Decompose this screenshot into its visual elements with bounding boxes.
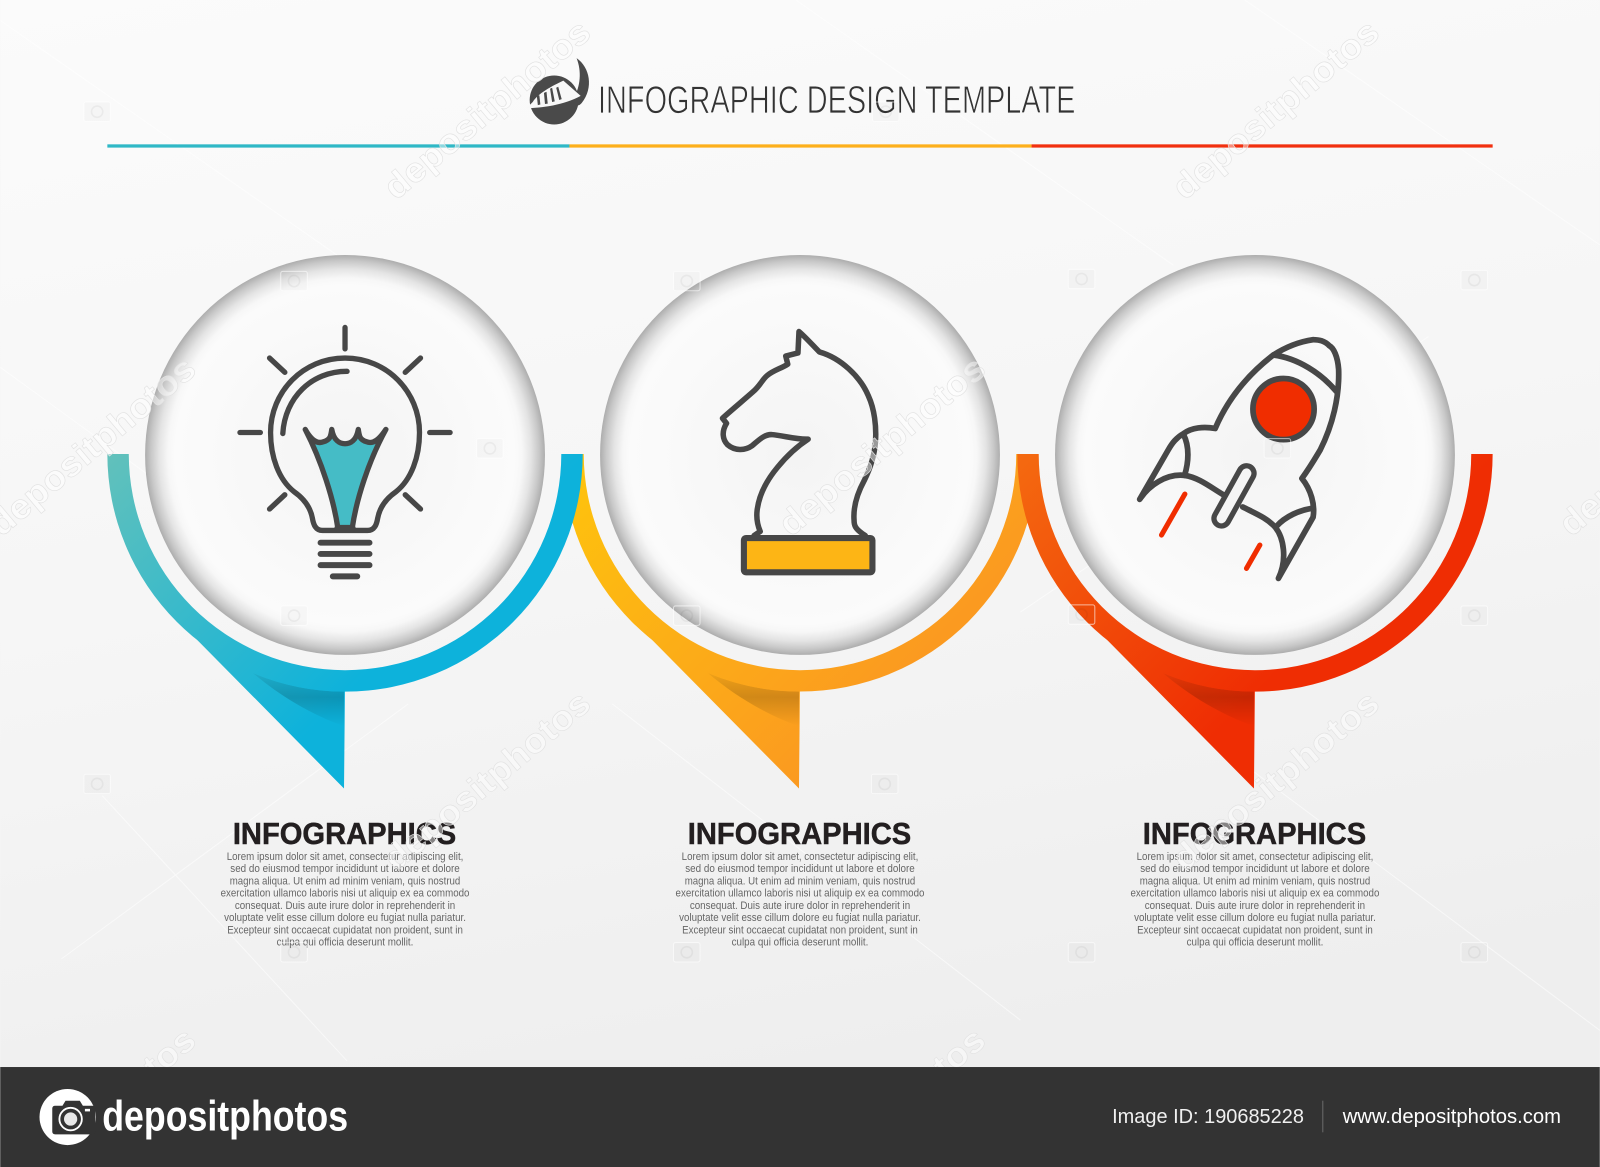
text block: step 2: sed do eiusmod tempor incididunt ut labore et dolore (685, 863, 915, 875)
header logo icon (527, 58, 589, 124)
text block: step 2: INFOGRAPHICS (688, 817, 911, 851)
website: www.depositphotos.com (1342, 1106, 1561, 1128)
text block: step 1: consequat. Duis aute irure dolor in reprehenderit in (235, 900, 455, 912)
text block: step 1: sed do eiusmod tempor incididunt ut labore et dolore (230, 863, 460, 875)
header rule: orange segment (569, 144, 1032, 148)
text block: step 1: Lorem ipsum dolor sit amet, consectetur adipiscing elit, (227, 851, 463, 863)
header rule: red segment (1032, 144, 1493, 148)
footer logo icon (40, 1089, 96, 1145)
header rule: teal segment (107, 144, 569, 148)
marker: red ring and pointer (1017, 454, 1493, 789)
text block: step 3: culpa qui officia deserunt mollit. (1187, 937, 1323, 949)
marker: orange ring and pointer (562, 454, 1038, 789)
text block: step 1 (221, 817, 470, 949)
footer bar (0, 1067, 1600, 1167)
disc: step 2 (600, 255, 1000, 655)
disc: step 3 (1055, 255, 1455, 655)
watermark overlay: depositphotos (1165, 684, 1387, 878)
text block: step 1: INFOGRAPHICS (233, 817, 456, 851)
text block: step 3: Lorem ipsum dolor sit amet, consectetur adipiscing elit, (1137, 851, 1373, 863)
image id: Image ID: 190685228 (1112, 1106, 1304, 1128)
text block: step 3: sed do eiusmod tempor incididunt ut labore et dolore (1140, 863, 1370, 875)
text block: step 2: consequat. Duis aute irure dolor in reprehenderit in (690, 900, 910, 912)
text block: step 2: Excepteur sint occaecat cupidatat non proident, sunt in (682, 924, 918, 936)
marker: blue ring and pointer (107, 454, 583, 789)
text block: step 1: voluptate velit esse cillum dolore eu fugiat nulla pariatur. (224, 912, 466, 924)
text block: step 3: voluptate velit esse cillum dolore eu fugiat nulla pariatur. (1134, 912, 1376, 924)
text block: step 3: Excepteur sint occaecat cupidatat non proident, sunt in (1137, 924, 1373, 936)
watermark overlay: depositphotos (772, 349, 993, 544)
text block: step 2: Lorem ipsum dolor sit amet, consectetur adipiscing elit, (682, 851, 918, 863)
icon: light bulb (240, 327, 450, 576)
watermark overlay: depositphotos (377, 13, 598, 207)
text block: step 1: Excepteur sint occaecat cupidatat non proident, sunt in (227, 924, 463, 936)
title: INFOGRAPHIC DESIGN TEMPLATE (598, 79, 1075, 122)
icon: rocket (1140, 340, 1339, 578)
text block: step 2 (676, 817, 925, 949)
watermark camera marks (84, 102, 1488, 962)
watermark overlay: depositphotos (1165, 13, 1387, 207)
text block: step 2: culpa qui officia deserunt mollit. (732, 937, 868, 949)
text block: step 3 (1131, 817, 1380, 949)
text block: step 3: exercitation ullamco laboris nisi ut aliquip ex ea commodo (1131, 888, 1380, 900)
text block: step 3: INFOGRAPHICS (1143, 817, 1366, 851)
text block: step 3: magna aliqua. Ut enim ad minim veniam, quis nostrud (1140, 875, 1370, 887)
text block: step 2: voluptate velit esse cillum dolore eu fugiat nulla pariatur. (679, 912, 921, 924)
text block: step 2: exercitation ullamco laboris nisi ut aliquip ex ea commodo (676, 888, 925, 900)
icon: chess knight (722, 332, 876, 572)
footer logo wordmark: depositphotos (102, 1092, 348, 1140)
text block: step 3: consequat. Duis aute irure dolor in reprehenderit in (1145, 900, 1365, 912)
text block: step 2: magna aliqua. Ut enim ad minim veniam, quis nostrud (685, 875, 915, 887)
text block: step 1: culpa qui officia deserunt mollit. (277, 937, 413, 949)
text block: step 1: exercitation ullamco laboris nisi ut aliquip ex ea commodo (221, 888, 470, 900)
watermark overlay: depositphotos (377, 684, 598, 878)
text block: step 1: magna aliqua. Ut enim ad minim veniam, quis nostrud (230, 875, 460, 887)
disc: step 1 (145, 255, 545, 655)
